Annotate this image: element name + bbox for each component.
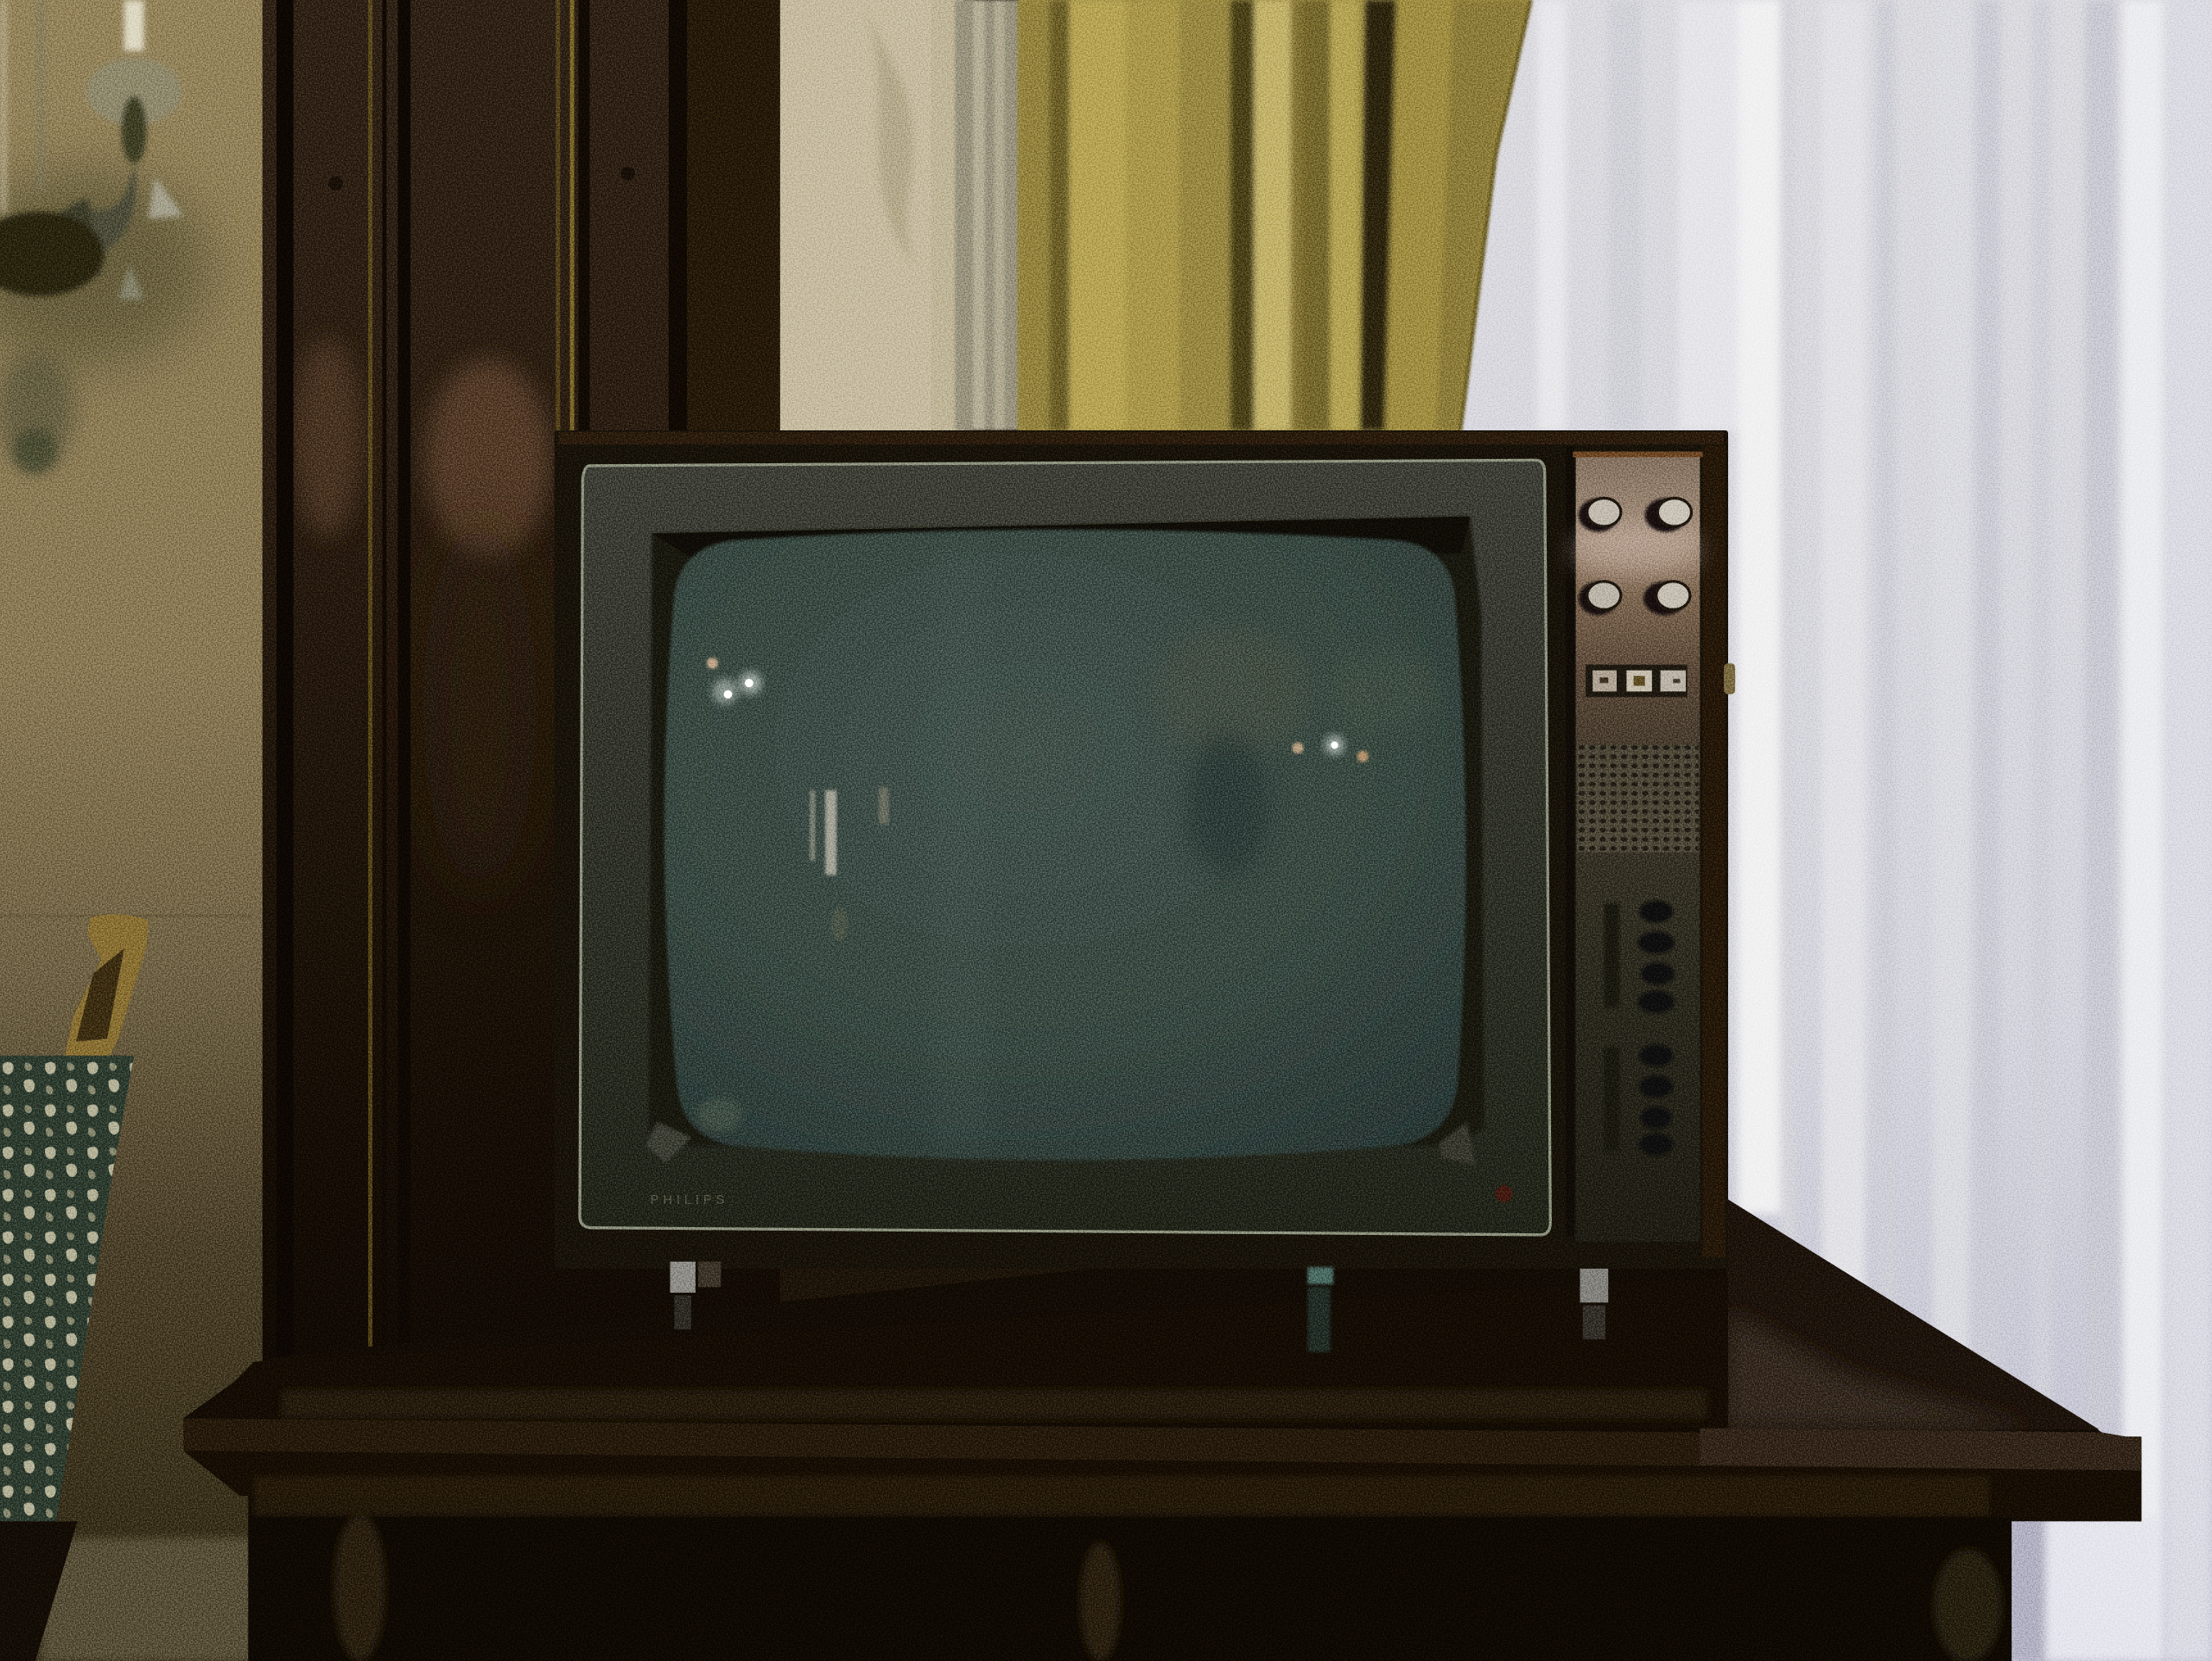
gold curtain: [1019, 0, 1530, 430]
wall sconce: glass candle holder: [0, 0, 183, 474]
dial buttons: [1638, 901, 1675, 1155]
table: dark wooden sideboard: [183, 1200, 2141, 1661]
screen reflections: ceiling lights: [707, 658, 1369, 762]
power indicator: [1496, 1186, 1512, 1202]
push buttons: [1586, 665, 1688, 697]
control panel: [1573, 452, 1703, 1242]
knob: [1579, 497, 1623, 532]
television cabinet: [555, 430, 1735, 1352]
white sheer curtain: [1453, 0, 2212, 1661]
chair: upholstered seat back with gold finial: [0, 914, 148, 1661]
knob: [1643, 580, 1692, 615]
brand label: PHILIPS: [651, 1193, 728, 1207]
knob: [1645, 497, 1693, 532]
screen recess: [646, 517, 1484, 1166]
crt screen: [664, 530, 1465, 1160]
tv feet: [671, 1262, 1608, 1352]
speaker grille: [1577, 745, 1699, 852]
screen bezel: [580, 460, 1550, 1235]
knob: [1579, 580, 1623, 615]
wood panelling: dark door frame: [263, 0, 780, 1397]
wall: textured wallpaper: [0, 0, 283, 1661]
slider tuners: [1604, 903, 1619, 1151]
marble wall section: [780, 0, 1020, 430]
